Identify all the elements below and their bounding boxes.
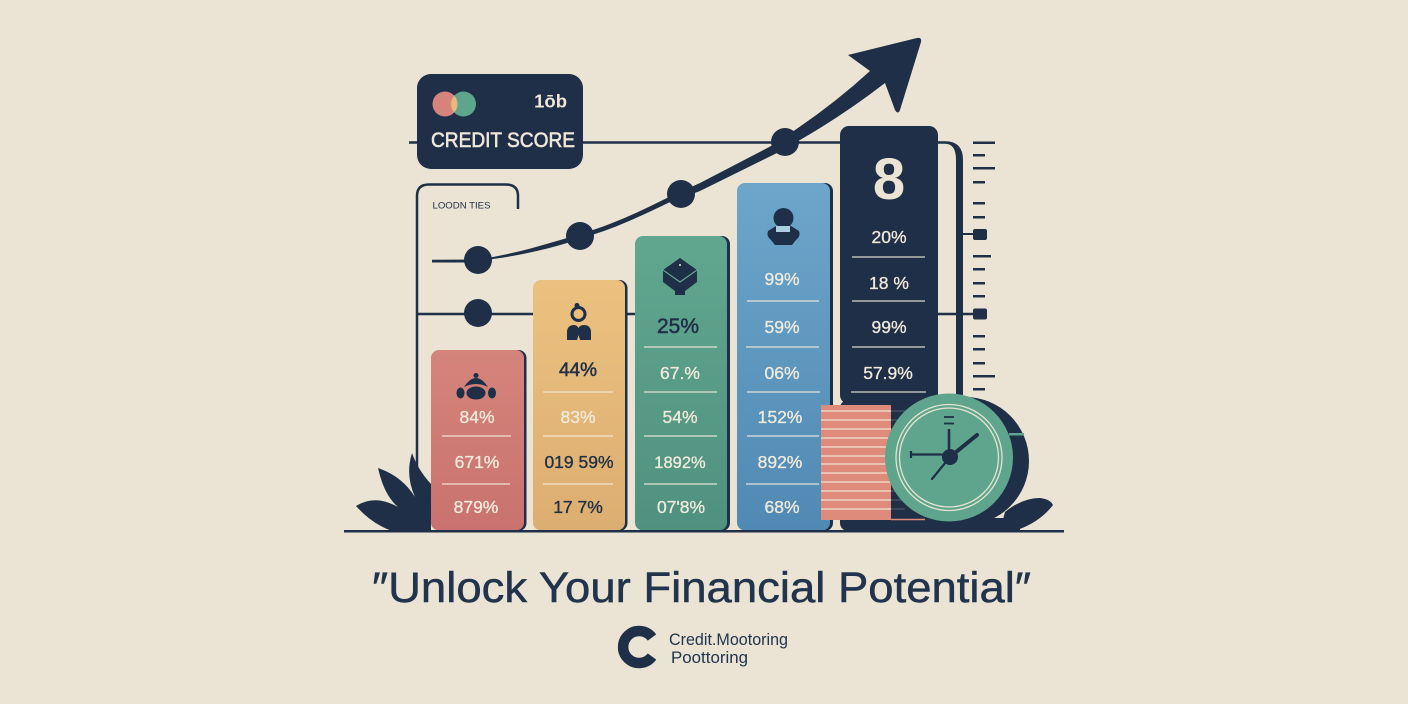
bar: green: 07'8% [657, 497, 705, 517]
brand subtitle: Poottoring [671, 649, 748, 667]
bar: yellow: 83% [560, 407, 596, 427]
bar: red: 84% [459, 407, 495, 427]
title: ″Unlock Your Financial Potential″ [372, 564, 1031, 612]
bar: blue [737, 183, 833, 531]
tab label: LOODN TIES [432, 200, 490, 212]
bar: navy [840, 126, 1020, 531]
icon: C mark [623, 631, 652, 663]
chart point 3 [667, 180, 695, 208]
lower line marker [464, 299, 492, 327]
chart point 2 [566, 222, 594, 250]
bar: blue: 892% [758, 452, 802, 472]
bar: yellow: 44% [559, 360, 597, 381]
bar: blue: 99% [764, 269, 800, 289]
card value: 1ōb [534, 90, 567, 112]
big numeral: 8 [873, 147, 905, 212]
bar: blue: 06% [764, 363, 800, 383]
loan ties tab frame [417, 184, 518, 500]
icon: yellow bar figure [567, 303, 591, 340]
bar: blue: 59% [764, 317, 800, 337]
bar: green: 67.% [660, 363, 700, 383]
bar: green [635, 236, 730, 531]
striped coin stack [821, 405, 925, 520]
bar: yellow: 17 7% [553, 497, 603, 517]
bar: red: 879% [454, 497, 498, 517]
growth arrow [432, 38, 921, 263]
left leaves [356, 453, 431, 531]
bar: navy: 18 % [869, 273, 909, 293]
brand name: Credit.Mootoring [669, 631, 788, 649]
bar: red: 671% [455, 452, 499, 472]
baseline axis [344, 530, 1064, 532]
right leaf [1000, 498, 1053, 530]
bar: green: 1892% [654, 454, 706, 472]
icon: red bar figure [456, 373, 496, 400]
icon: green bar cube [663, 258, 697, 295]
bar: yellow [533, 280, 628, 531]
bar: red [431, 350, 526, 531]
bar: green: 25% [657, 315, 699, 338]
lower guide line [417, 313, 975, 315]
clock [885, 394, 1029, 525]
credit score card [417, 74, 583, 169]
measurement scale with ticks [963, 142, 995, 390]
horizontal guide line at card level [409, 141, 840, 144]
bar: blue: 68% [764, 497, 800, 517]
bar: blue: 152% [758, 407, 802, 427]
chart point 4 [771, 128, 799, 156]
icon: blue bar figure [767, 208, 800, 245]
right vertical rail [938, 141, 963, 395]
bar: navy: 57.9% [863, 363, 913, 383]
bar: navy: 99% [871, 317, 907, 337]
clock hands [911, 417, 977, 479]
bar: yellow: 019 59% [544, 452, 614, 472]
bar: green: 54% [662, 407, 698, 427]
bar: navy: 20% [871, 227, 907, 247]
brand logo [623, 631, 788, 667]
card logo circles [432, 92, 476, 116]
chart point 1 [464, 246, 492, 274]
card title: CREDIT SCORE [431, 128, 575, 152]
